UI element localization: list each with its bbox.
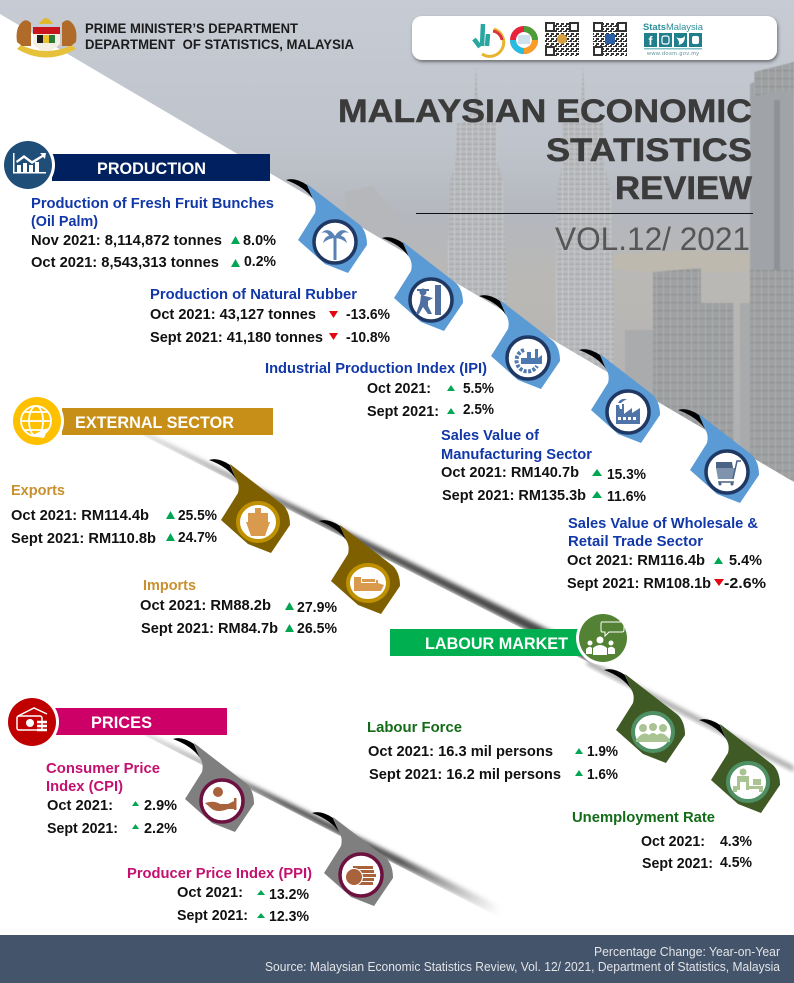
title rule xyxy=(416,213,753,214)
icon: palm tree xyxy=(321,230,349,260)
footer: Percentage Change: Year-on-Year xyxy=(594,945,780,959)
block: wholesale and retail sales: Sept 2021: RM108.1b xyxy=(567,575,711,592)
footer: Source: Malaysian Economic Statistics Review, Vol. 12/ 2021, Department of Statistics, Malaysia xyxy=(265,960,780,974)
block: unemployment rate: 4.3% xyxy=(720,833,752,850)
block: producer price index: 13.2% xyxy=(269,886,309,903)
block: wholesale and retail sales: Oct 2021: RM116.4b xyxy=(567,552,705,569)
block: natural rubber: -10.8% xyxy=(346,329,390,346)
icon: factory xyxy=(616,399,640,424)
diagonal shadow: external sector xyxy=(120,424,600,700)
icon: money and coins xyxy=(17,708,47,730)
header: department names: PRIME MINISTER’S DEPARTMENT xyxy=(85,21,299,36)
block: fresh fruit bunches: Production of Fresh Fruit Bunches xyxy=(31,195,274,212)
icon: rubber tapper xyxy=(416,285,441,315)
pin: natural rubber xyxy=(382,237,463,331)
pin: oil palm xyxy=(286,179,367,273)
block: wholesale and retail sales: -2.6% xyxy=(724,575,766,592)
block: natural rubber: Oct 2021: 43,127 tonnes xyxy=(150,306,316,323)
pin: exports xyxy=(209,459,290,553)
block: industrial production index: Oct 2021: xyxy=(367,380,431,397)
logo bar xyxy=(412,16,777,60)
block: producer price index: Producer Price Index (PPI) xyxy=(127,865,312,882)
block: consumer price index: Consumer Price xyxy=(46,760,160,777)
block: exports xyxy=(11,482,217,547)
block: consumer price index: 2.2% xyxy=(144,820,177,837)
block: producer price index xyxy=(127,865,312,925)
block: producer price index: Sept 2021: xyxy=(177,907,248,924)
QR code: Facebook xyxy=(593,22,627,56)
block: manufacturing sales xyxy=(441,427,646,505)
pin: wholesale and retail xyxy=(678,409,759,503)
banner: labour market: LABOUR MARKET xyxy=(425,634,569,653)
title: STATISTICS xyxy=(546,132,752,168)
block: unemployment rate: Sept 2021: xyxy=(642,855,713,872)
block: manufacturing sales: Sales Value of xyxy=(441,427,540,444)
banner: labour market xyxy=(390,611,630,665)
pin: consumer price index xyxy=(173,738,254,832)
block: imports: 26.5% xyxy=(297,620,337,637)
block: producer price index: 12.3% xyxy=(269,908,309,925)
block: consumer price index: Index (CPI) xyxy=(46,778,123,795)
StatsMalaysia social block xyxy=(643,22,704,57)
diagonal shadow: prices xyxy=(130,728,510,950)
icon: hand with coin xyxy=(205,787,236,811)
logo: SDG wheel xyxy=(513,29,535,51)
block: exports: 24.7% xyxy=(178,529,217,546)
icon: gear factory xyxy=(517,349,542,371)
block: fresh fruit bunches xyxy=(31,195,276,271)
pin: manufacturing xyxy=(579,349,660,443)
block: manufacturing sales: Sept 2021: RM135.3b xyxy=(442,487,586,504)
block: wholesale and retail sales: 5.4% xyxy=(729,552,762,569)
block: unemployment rate: Unemployment Rate xyxy=(572,809,715,826)
block: wholesale and retail sales xyxy=(567,515,766,592)
block: labour force: 1.6% xyxy=(587,766,618,783)
block: labour force: Labour Force xyxy=(367,719,462,736)
pin: unemployment rate xyxy=(699,719,780,813)
pin: labour force xyxy=(604,669,685,763)
icon: three people xyxy=(636,723,670,742)
block: fresh fruit bunches: 0.2% xyxy=(244,253,276,270)
block: exports: 25.5% xyxy=(178,507,217,524)
block: wholesale and retail sales: Sales Value of Wholesale & xyxy=(568,515,758,532)
block: imports: 27.9% xyxy=(297,599,337,616)
icon: people with speech bubble xyxy=(586,622,624,655)
pin: producer price index xyxy=(312,812,393,906)
banner: prices: PRICES xyxy=(91,713,152,732)
title: REVIEW xyxy=(615,170,753,206)
pin: industrial production xyxy=(479,295,560,389)
block: producer price index: Oct 2021: xyxy=(177,884,243,901)
icon: growth chart xyxy=(13,153,46,174)
block: imports: Oct 2021: RM88.2b xyxy=(140,597,271,614)
block: natural rubber xyxy=(150,286,390,346)
block: industrial production index xyxy=(265,360,494,420)
block: natural rubber: Production of Natural Rubber xyxy=(150,286,357,303)
block: labour force: 1.9% xyxy=(587,743,618,760)
block: industrial production index: Industrial Production Index (IPI) xyxy=(265,360,487,377)
title: MALAYSIAN ECONOMIC xyxy=(338,93,752,129)
block: consumer price index: Oct 2021: xyxy=(47,797,113,814)
block: exports: Sept 2021: RM110.8b xyxy=(11,530,156,547)
block: imports: Imports xyxy=(143,577,196,594)
block: unemployment rate: Oct 2021: xyxy=(641,833,705,850)
title xyxy=(338,93,753,206)
block: industrial production index: 2.5% xyxy=(463,401,494,418)
header: crest xyxy=(17,18,76,58)
block: manufacturing sales: 11.6% xyxy=(607,488,646,505)
icon: stacked coins xyxy=(346,866,376,886)
diagonal shadow: labour market xyxy=(580,659,794,800)
volume label: VOL.12/ 2021 xyxy=(555,221,750,257)
block: natural rubber: -13.6% xyxy=(346,306,390,323)
banner: prices xyxy=(5,695,227,749)
icon: person on bench xyxy=(733,768,763,792)
banner: external sector: EXTERNAL SECTOR xyxy=(75,413,234,432)
block: imports: Sept 2021: RM84.7b xyxy=(141,620,278,637)
block: labour force: Sept 2021: 16.2 mil persons xyxy=(369,766,561,783)
block: fresh fruit bunches: 8.0% xyxy=(243,232,276,249)
pin: imports xyxy=(319,520,400,614)
block: unemployment rate xyxy=(572,809,752,872)
block: fresh fruit bunches: Oct 2021: 8,543,313 tonnes xyxy=(31,254,219,271)
footer xyxy=(0,935,794,983)
banner: production xyxy=(1,138,270,192)
QR code: website xyxy=(545,22,579,56)
block: industrial production index: 5.5% xyxy=(463,380,494,397)
block: manufacturing sales: 15.3% xyxy=(607,466,646,483)
block: fresh fruit bunches: Nov 2021: 8,114,872 tonnes xyxy=(31,232,222,249)
block: exports: Exports xyxy=(11,482,65,499)
block: natural rubber: Sept 2021: 41,180 tonnes xyxy=(150,329,323,346)
StatsMalaysia social block: StatsMalaysia xyxy=(643,22,704,33)
header: department names: DEPARTMENT OF STATISTICS, MALAYSIA xyxy=(85,37,354,52)
block: consumer price index xyxy=(46,760,177,837)
header: department names xyxy=(85,21,354,52)
icon: cargo ship xyxy=(354,577,384,591)
block: unemployment rate: 4.5% xyxy=(720,854,752,871)
block: labour force: Oct 2021: 16.3 mil persons xyxy=(368,743,553,760)
block: wholesale and retail sales: Retail Trade Sector xyxy=(568,533,703,550)
icon: globe xyxy=(21,406,51,438)
block: manufacturing sales: Oct 2021: RM140.7b xyxy=(441,464,579,481)
block: labour force xyxy=(367,719,618,783)
banner: external sector xyxy=(10,394,273,448)
icon: shopping cart xyxy=(716,461,741,486)
icon: container ship xyxy=(246,508,270,536)
banner: production: PRODUCTION xyxy=(97,159,206,178)
block: consumer price index: Sept 2021: xyxy=(47,820,118,837)
block: manufacturing sales: Manufacturing Sector xyxy=(441,446,592,463)
background photo: Kuala Lumpur skyline xyxy=(0,0,794,482)
block: fresh fruit bunches: (Oil Palm) xyxy=(31,213,98,230)
block: imports xyxy=(140,577,337,637)
block: industrial production index: Sept 2021: xyxy=(367,403,439,420)
block: consumer price index: 2.9% xyxy=(144,797,177,814)
StatsMalaysia social block: www.dosm.gov.my xyxy=(646,51,699,57)
StatsMalaysia social block: f xyxy=(648,34,654,48)
block: exports: Oct 2021: RM114.4b xyxy=(11,507,149,524)
logo: anniversary xyxy=(474,24,504,56)
